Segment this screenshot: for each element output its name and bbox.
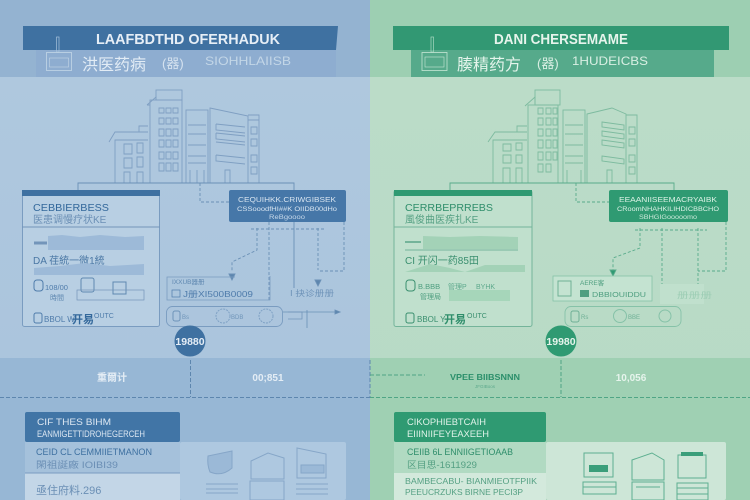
chart: lower area	[34, 263, 144, 275]
panel: right green background	[370, 0, 750, 500]
panel: right lower info card: CEIIB 6L ENNIIGETIOAAB	[407, 447, 513, 457]
callout: left blue box	[229, 190, 346, 222]
right process box	[553, 276, 652, 301]
right subtitle strip: 1HUDEICBS	[572, 54, 648, 68]
left icon row	[166, 306, 302, 326]
footer stat: BBOL W	[44, 315, 75, 324]
left year badge: 19880	[175, 336, 205, 348]
heading: left title banner: LAAFBDTHD OFERHADUK	[96, 31, 280, 48]
stats row: 管理P	[448, 282, 467, 291]
panel: left blue background	[0, 0, 370, 500]
panel: left info card: DA 荏統一微1統	[33, 254, 105, 267]
footer stat: OUTC	[467, 313, 487, 320]
left header	[23, 26, 338, 77]
callout: right green box: EEAANIISEEMACRYAIBK	[619, 195, 717, 204]
panel: right info card	[394, 190, 532, 326]
panel: right lower info card: BAMBECABU- BIANMIEOTFPIIK	[405, 476, 537, 486]
icon: folder	[251, 453, 284, 479]
heading: right title banner: DANI CHERSEMAME	[494, 31, 628, 48]
panel: right lower info card: EIIINIIFEYEAXEEH	[407, 429, 489, 439]
right year badge: 19980	[546, 336, 576, 348]
panel: right info card: CERRBEPRREBS	[405, 202, 493, 214]
icon: tray	[584, 453, 613, 477]
icon: printer	[297, 448, 326, 478]
panel: right lower info card: CIKOPHIEBTCAIH	[407, 417, 486, 427]
right year badge	[546, 326, 576, 356]
icon: right hospital building	[488, 90, 637, 183]
panel: right illustration card	[546, 442, 726, 500]
right side label: 册册册	[677, 291, 712, 300]
callout: right green box: CRoomNHAHKILIHDICBBCHO	[617, 206, 719, 213]
panel: left lower info card: EANMIGETTIDROHEGERCEH	[37, 429, 145, 439]
icon: folder	[632, 453, 664, 480]
left process box: IXXUB器册	[172, 278, 205, 286]
footer stat: 开易	[444, 313, 466, 326]
left band labels	[97, 371, 284, 384]
right band labels: VPEE BIIBSNNN	[450, 372, 520, 382]
chart: top area	[405, 236, 518, 250]
right band labels	[450, 372, 647, 389]
stats row: B.BBB	[418, 282, 440, 291]
stats row: 108/00	[45, 283, 68, 292]
left band labels: 00;851	[252, 373, 284, 384]
right process box: AERE客	[580, 278, 605, 287]
right band labels: JFGIBoos	[475, 384, 496, 389]
left subtitle strip	[36, 37, 336, 77]
chart: top area	[34, 235, 144, 250]
footer stat	[34, 313, 114, 326]
stats row: 管理局	[420, 292, 441, 301]
callout: left blue box: CEQUIHKK.CRIWGIBSEK	[238, 195, 336, 204]
right subtitle strip: (器)	[537, 56, 559, 71]
panel: right lower info card: PEEUCRZUKS BIRNE PECI3P	[405, 487, 523, 497]
stats row: BYHK	[476, 284, 495, 291]
right side label	[660, 284, 712, 304]
right process box: DBBIOUIDDU	[592, 290, 646, 299]
panel: left lower info card	[25, 412, 180, 500]
panel: left lower info card: 亟住府料.296	[36, 483, 101, 497]
stats row	[406, 280, 510, 301]
heading: right title banner	[393, 26, 729, 50]
callout: left blue box: CSSooodfHI##K OIIDB00dHo	[237, 206, 337, 213]
footer stat	[406, 313, 487, 326]
stats row: 時間	[50, 294, 64, 302]
chart: lower area	[405, 264, 525, 272]
left subtitle strip: (器)	[162, 56, 184, 71]
callout: left blue box: ReBgoooo	[269, 215, 306, 221]
left icon row: Bs	[182, 315, 189, 321]
panel: left illustration card	[180, 442, 346, 500]
panel: right info card: CI 开闪一药85田	[405, 254, 479, 267]
icon: printer	[678, 455, 706, 478]
right connector lines	[450, 183, 726, 290]
heading: left title banner	[23, 26, 338, 50]
left process box: J册XI500B0009	[183, 290, 254, 299]
right band labels: 10,056	[616, 373, 647, 384]
left side label: I 抉诊册册	[290, 288, 334, 298]
left year badge	[174, 326, 206, 356]
icon: pouch	[208, 451, 232, 474]
panel: left lower info card: CEID CL CEMMIIETMANON	[36, 447, 152, 457]
icon: left hospital building	[109, 90, 259, 183]
panel: left info card: 医患调慢疗状KE	[33, 213, 107, 226]
panel: left info card	[22, 190, 160, 326]
callout: right green box: SBHGIGooooomo	[639, 215, 698, 221]
left process box	[167, 276, 270, 300]
panel: left info card: CEBBIERBESS	[33, 202, 109, 214]
panel: right lower info card	[394, 412, 546, 500]
left subtitle strip: SIOHHLAIISB	[205, 54, 291, 68]
footer stat: OUTC	[94, 313, 114, 320]
panel: left lower info card: 閑祖誕廠 IOIBI39	[36, 459, 118, 470]
left band labels: 重爾计	[97, 371, 127, 384]
footer stat: 开易	[72, 313, 94, 326]
footer stat: BBOL Y	[417, 315, 446, 324]
dashed dividers	[0, 360, 750, 398]
callout: right green box	[609, 190, 728, 222]
left connector lines	[78, 183, 344, 328]
left subtitle strip: 洪医药病	[82, 56, 146, 74]
right header	[393, 26, 729, 77]
right subtitle strip	[411, 37, 714, 77]
right icon row: Rs	[581, 315, 588, 321]
left icon row: BDB	[231, 315, 243, 321]
right subtitle strip: 腠精药方	[457, 56, 521, 74]
panel: right info card: 風俊曲医疾扎KE	[405, 213, 479, 226]
panel: right lower info card: 区目思-1611929	[407, 460, 477, 470]
right icon row	[565, 306, 681, 326]
right icon row: BBE	[628, 315, 640, 321]
stats row	[34, 278, 144, 302]
panel: left lower info card: CIF THES BIHM	[37, 417, 111, 427]
